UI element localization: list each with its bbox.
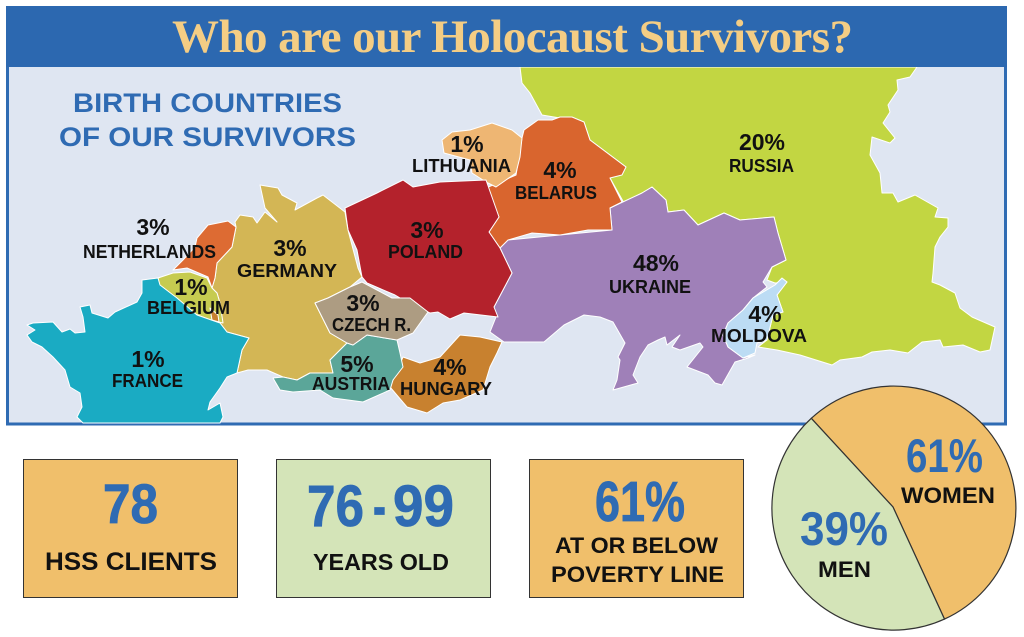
Lithuania <box>442 123 522 187</box>
men label: 39% <box>800 502 888 555</box>
country shapes <box>27 67 995 423</box>
title banner <box>6 6 1007 67</box>
women label: WOMEN <box>901 483 995 508</box>
country labels: GERMANY <box>237 261 337 281</box>
country labels: LITHUANIA <box>412 156 511 176</box>
Belarus <box>486 117 626 248</box>
Russia <box>520 67 995 365</box>
men label <box>800 502 888 582</box>
France <box>27 278 249 423</box>
country labels: 4% <box>543 157 577 183</box>
country labels: BELARUS <box>515 183 597 203</box>
Belgium <box>158 272 223 323</box>
map heading: OF OUR SURVIVORS <box>59 122 356 152</box>
country labels: RUSSIA <box>729 156 794 176</box>
country labels: 4% <box>748 301 782 327</box>
Austria <box>273 335 403 402</box>
country labels: 3% <box>273 235 307 261</box>
stat box: HSS clients: 78 <box>103 472 158 535</box>
slice: women 61% <box>811 386 1016 619</box>
country labels: UKRAINE <box>609 277 691 297</box>
map panel <box>8 60 1006 424</box>
Luxembourg patch <box>210 308 219 322</box>
stat box: poverty line: POVERTY LINE <box>551 562 724 587</box>
women label <box>901 429 995 508</box>
country labels: BELGIUM <box>147 298 230 318</box>
country labels: 3% <box>410 217 444 243</box>
country labels <box>83 129 807 399</box>
pie chart: women and men <box>772 386 1016 630</box>
Moldova <box>723 278 787 358</box>
Hungary <box>390 335 502 413</box>
map heading: BIRTH COUNTRIES <box>73 88 342 118</box>
slice: men 39% <box>772 418 944 630</box>
country labels: NETHERLANDS <box>83 242 216 262</box>
country labels: FRANCE <box>112 371 183 391</box>
country labels: 4% <box>433 354 467 380</box>
country labels: 1% <box>131 346 165 372</box>
country labels: 20% <box>739 129 785 155</box>
country labels: AUSTRIA <box>312 374 390 394</box>
country labels: 1% <box>450 131 484 157</box>
stat box: age range <box>276 460 490 598</box>
country labels: 1% <box>174 274 208 300</box>
Germany <box>212 185 362 380</box>
stat box: age range: 76 <box>307 474 364 539</box>
stat box: poverty line: AT OR BELOW <box>555 533 718 558</box>
Czech Republic <box>315 282 428 345</box>
country labels: MOLDOVA <box>711 326 807 346</box>
country labels: 48% <box>633 250 679 276</box>
stat box: HSS clients: HSS CLIENTS <box>45 548 217 576</box>
country labels: 3% <box>136 214 170 240</box>
country labels: 5% <box>340 351 374 377</box>
stat box: HSS clients <box>24 460 238 598</box>
title banner: Who are our Holocaust Survivors? <box>172 11 853 63</box>
women label: 61% <box>906 429 983 482</box>
country labels: POLAND <box>388 242 463 262</box>
country labels: 3% <box>346 290 380 316</box>
Ukraine <box>490 187 786 390</box>
stat box: age range: - <box>373 474 386 539</box>
stat box: poverty line <box>530 460 744 598</box>
country labels: CZECH R. <box>332 315 411 335</box>
stat box: age range: YEARS OLD <box>313 549 449 575</box>
Poland <box>345 180 512 319</box>
Netherlands <box>173 221 236 288</box>
stat box: age range: 99 <box>393 474 454 539</box>
stat box: poverty line: 61% <box>595 470 685 534</box>
men label: MEN <box>818 557 871 582</box>
map heading <box>59 88 356 152</box>
country labels: HUNGARY <box>400 379 492 399</box>
